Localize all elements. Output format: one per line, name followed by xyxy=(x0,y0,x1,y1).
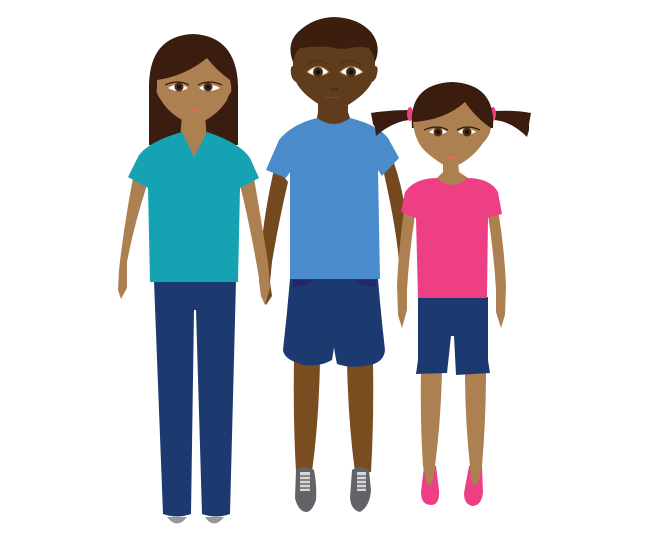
girl neck xyxy=(437,160,468,190)
woman eyes xyxy=(165,82,222,92)
girl shorts xyxy=(416,297,490,375)
woman arms xyxy=(118,178,270,305)
girl face xyxy=(413,102,491,166)
girl legs xyxy=(421,370,486,486)
woman mouth xyxy=(189,108,200,112)
boy nose and mouth xyxy=(325,88,341,98)
boy eyes xyxy=(307,61,363,77)
girl shirt xyxy=(401,178,502,298)
girl arms xyxy=(397,210,506,328)
girl shoes xyxy=(421,466,483,506)
boy sneakers xyxy=(295,467,371,512)
boy legs xyxy=(294,360,373,472)
boy shorts xyxy=(283,279,385,367)
figure: girl xyxy=(371,82,531,506)
girl hair xyxy=(412,82,493,128)
girl pigtails xyxy=(371,107,531,137)
figure: woman xyxy=(118,34,270,524)
girl eyes xyxy=(424,127,480,136)
girl mouth xyxy=(445,156,457,160)
boy hair xyxy=(290,17,378,62)
woman hair xyxy=(149,34,238,145)
boy arms xyxy=(259,160,406,305)
boy head xyxy=(291,40,378,108)
boy neck xyxy=(316,95,352,124)
woman face xyxy=(156,58,231,123)
boy shirt xyxy=(266,118,399,279)
woman shoes xyxy=(167,517,224,524)
woman shirt xyxy=(128,132,259,282)
woman trousers xyxy=(154,281,236,516)
figure: boy xyxy=(259,17,406,512)
woman neck xyxy=(180,115,207,160)
